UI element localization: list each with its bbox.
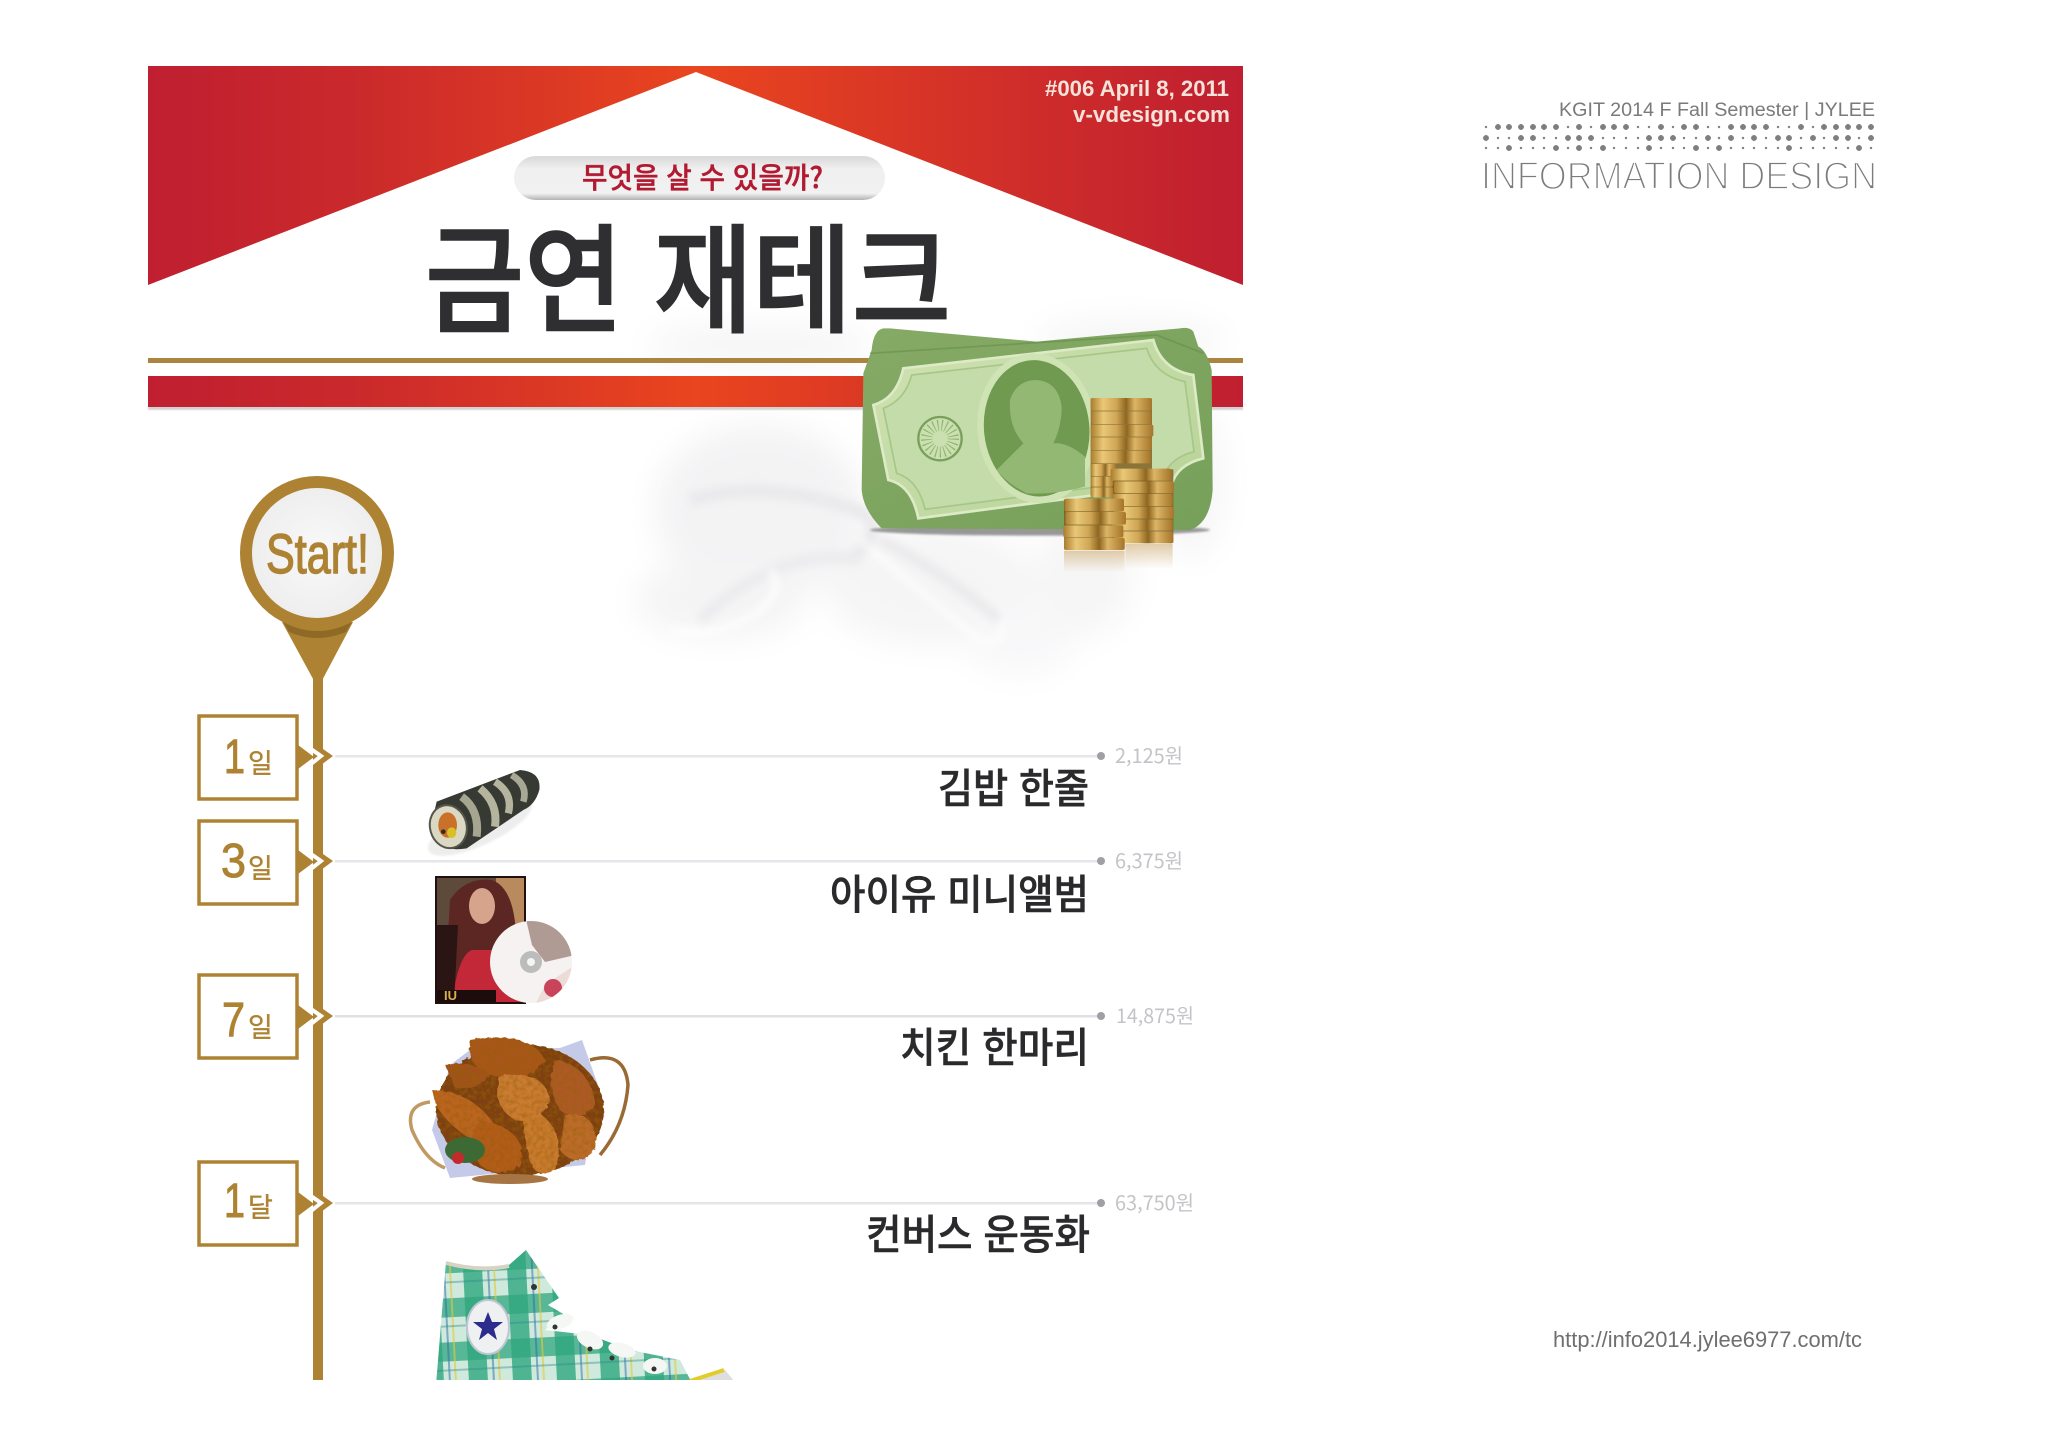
title: 금연 재테크: [425, 186, 951, 357]
subtitle pill: 무엇을 살 수 있을까?: [582, 155, 823, 197]
front bill: [873, 340, 1203, 518]
leader line: [335, 1202, 1101, 1204]
shadow under red band: [148, 406, 1243, 410]
day box: 3: [221, 835, 246, 888]
rosette: [918, 417, 962, 460]
day box: 7: [222, 994, 245, 1047]
red band: [148, 376, 1243, 407]
row 3: 7 days: [199, 975, 1194, 1184]
item name: 컨버스 운동화: [866, 1201, 1090, 1261]
day box: 일: [248, 847, 273, 886]
item name: 아이유 미니앨범: [830, 861, 1089, 921]
course line: KGIT 2014 F Fall Semester | JYLEE: [1559, 100, 1875, 121]
day box: [199, 975, 333, 1058]
row 2: 3 days: [199, 821, 1183, 1005]
row 4: 1 month: [199, 1162, 1194, 1385]
item name: 김밥 한줄: [938, 755, 1089, 815]
row 1: 1 day: [199, 716, 1183, 867]
information design wordmark: INFORMATION DESIGN: [1481, 155, 1877, 198]
day box: 달: [248, 1186, 273, 1225]
leader line: [335, 1015, 1101, 1018]
start marker: Start!: [266, 522, 369, 585]
icon: IU album with CD: IU: [444, 988, 457, 1003]
dot pattern: [1483, 124, 1874, 151]
issue info: [1045, 76, 1230, 127]
smoke background: [635, 320, 1225, 675]
day box: 1: [224, 731, 245, 784]
url: http://info2014.jylee6977.com/tc: [1553, 1327, 1862, 1352]
issue info: #006 April 8, 2011: [1045, 76, 1229, 101]
item name: 치킨 한마리: [900, 1014, 1089, 1074]
portrait medallion: [973, 351, 1100, 505]
price: 14,875원: [1116, 1000, 1194, 1029]
panel: header banner: [148, 66, 1243, 410]
icon: converse sneaker: [436, 1250, 735, 1385]
course header: [1481, 100, 1877, 198]
price: 2,125원: [1115, 740, 1183, 769]
issue info: v-vdesign.com: [1073, 102, 1230, 127]
day box: 1: [224, 1175, 245, 1228]
day box: 일: [248, 742, 273, 781]
icon: fried chicken basket: [410, 1038, 628, 1184]
day box: [199, 1162, 333, 1245]
price: 63,750원: [1115, 1187, 1194, 1216]
leader line: [335, 755, 1101, 758]
subtitle pill: [514, 155, 885, 200]
icon: money and coins: [862, 328, 1213, 572]
coin stacks: [1063, 398, 1174, 572]
day box: [199, 821, 333, 904]
gold stripe: [148, 358, 1243, 363]
icon: IU album with CD: [436, 877, 575, 1005]
leader line: [335, 860, 1101, 862]
day box: 일: [248, 1006, 273, 1045]
back bills: [862, 328, 1213, 530]
red roof: [148, 66, 1243, 285]
icon: gimbap roll: [421, 770, 540, 867]
timeline: vertical line: [313, 675, 323, 1380]
start marker: [246, 482, 388, 688]
day box: [199, 716, 333, 799]
price: 6,375원: [1115, 845, 1183, 874]
